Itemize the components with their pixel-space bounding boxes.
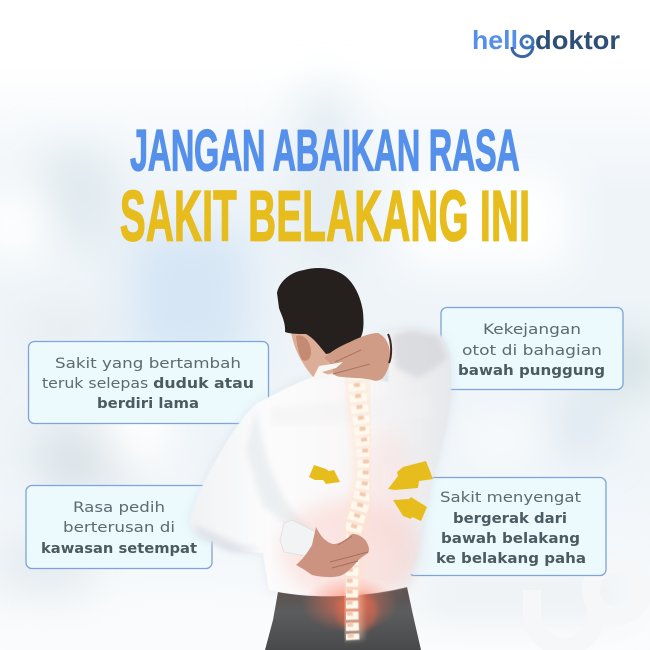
panel: prolonged sitting: Sakit yang bertambah (55, 356, 241, 372)
logo: hellodoktor (472, 25, 620, 57)
logo: hellodoktor: doktor (535, 25, 620, 55)
spine (350, 372, 366, 640)
text: shooting pain: ke belakang paha (436, 551, 586, 567)
icon: lightning right bottom (393, 497, 427, 521)
panel: prolonged sitting: berdiri lama (97, 396, 199, 412)
neck and ear (290, 320, 362, 378)
pants (265, 587, 421, 650)
text: shooting pain: bergerak dari (453, 511, 567, 527)
panel: persistent burning: Rasa pedih (73, 500, 165, 516)
lower back glow (280, 500, 420, 600)
panel: muscle spasm: bawah punggung (458, 363, 605, 379)
watermark: stethoscope logo (532, 564, 643, 647)
title (120, 117, 530, 257)
icon: lightning left (309, 465, 340, 484)
icon: lightning right top (388, 461, 433, 490)
shirt (190, 329, 451, 596)
panel: muscle spasm: otot di bahagian (462, 343, 602, 359)
title: SAKIT BELAKANG INI (120, 177, 530, 257)
text: shooting pain (436, 490, 586, 567)
text: shooting pain: Sakit menyengat (440, 490, 581, 506)
shirt shadow (190, 329, 452, 596)
panel: prolonged sitting: teruk selepas duduk atau (42, 376, 254, 392)
panel: shooting pain (408, 478, 606, 576)
title: JANGAN ABAIKAN RASA (130, 117, 520, 183)
upper hand (324, 333, 390, 381)
panel: persistent burning: berterusan di (63, 520, 175, 536)
logo icon: stethoscope (512, 36, 533, 57)
text: shooting pain: bawah belakang (441, 531, 580, 547)
shirt shade (195, 330, 447, 552)
cuff (280, 520, 317, 556)
collar (314, 362, 343, 381)
panel: muscle spasm (441, 308, 623, 390)
panel: muscle spasm: Kekejangan (483, 322, 581, 338)
lower hand (296, 527, 369, 577)
head hair (277, 268, 363, 354)
panel: persistent burning: kawasan setempat (41, 541, 197, 557)
panel: prolonged sitting (28, 342, 268, 424)
man with back pain (190, 268, 452, 650)
logo: hellodoktor: hell (472, 25, 518, 55)
panel: persistent burning (26, 486, 212, 568)
